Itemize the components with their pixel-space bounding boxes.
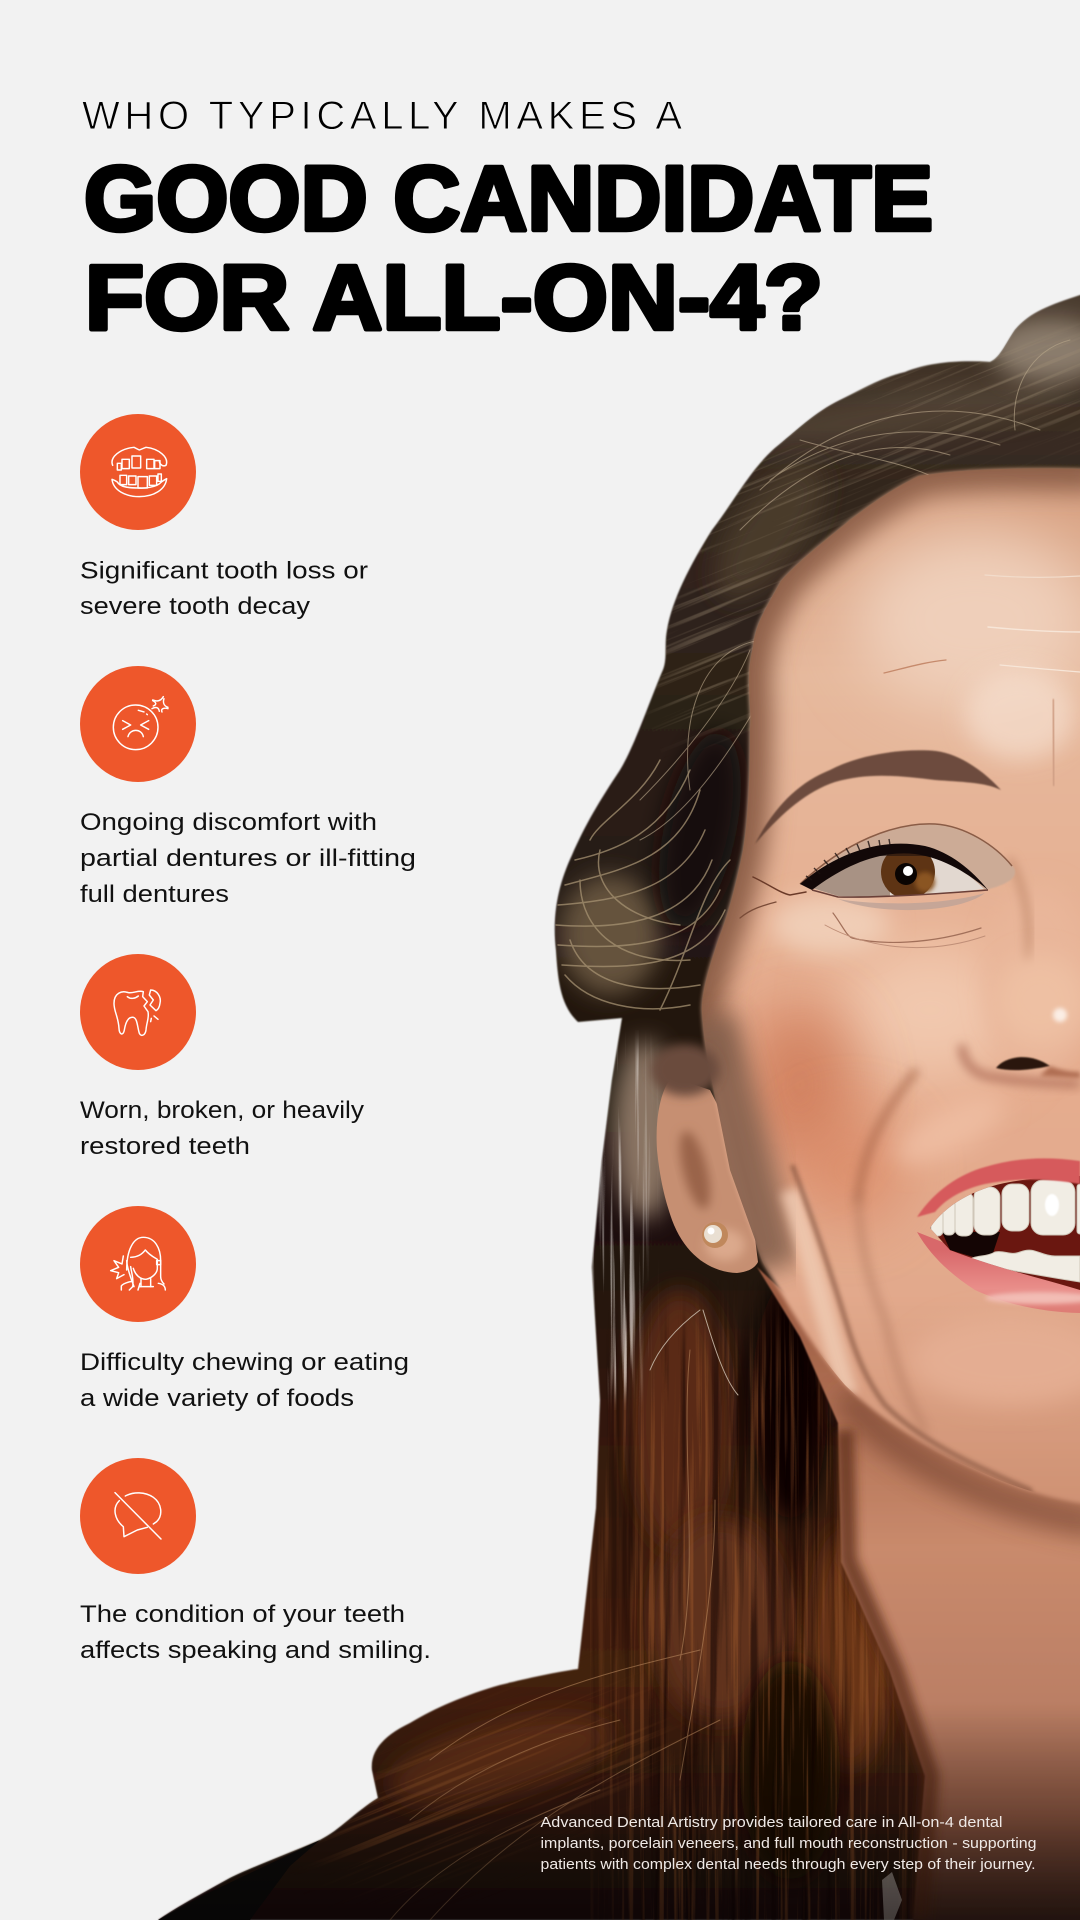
- icon circle: [80, 954, 196, 1070]
- item 5: speaking and smiling: [80, 1458, 431, 1664]
- footer note: [540, 1815, 1036, 1873]
- ear: [657, 1077, 758, 1273]
- lower lip: [917, 1232, 1080, 1313]
- title: [82, 94, 933, 349]
- earring: [702, 1222, 728, 1248]
- nose: [962, 955, 1080, 1084]
- grey-brown sideburn band: [705, 1020, 770, 1270]
- hair mass: [158, 294, 1080, 1920]
- item 5: speaking and smiling: affects speaking and smiling.: [80, 1637, 431, 1664]
- icon: crossed speech bubble: [115, 1493, 161, 1539]
- item 4: chewing difficulty: [80, 1206, 409, 1412]
- hair over ear top: [651, 1044, 719, 1096]
- lower lid: [812, 890, 988, 897]
- eyebrow: [755, 750, 1001, 844]
- bottom fade: [158, 1724, 1080, 1920]
- icon: gapped teeth: [112, 447, 167, 497]
- item 2: denture discomfort: partial dentures or ill-fitting: [80, 845, 416, 872]
- item text: Worn, broken, or heavily: [80, 1097, 365, 1124]
- kicker line: WHO TYPICALLY MAKES A: [82, 94, 682, 138]
- item 3: broken teeth: restored teeth: [80, 1133, 250, 1160]
- dark mouth interior: [930, 1176, 1080, 1290]
- hair shadow on neck: [845, 1430, 930, 1920]
- item text: Ongoing discomfort with: [80, 809, 377, 836]
- icon circle: [80, 666, 196, 782]
- item 4: chewing difficulty: a wide variety of foods: [80, 1385, 354, 1412]
- footer note: patients with complex dental needs through every step of their journey.: [540, 1857, 1036, 1873]
- streak texture: top hair: [652, 360, 1080, 741]
- item 1: tooth loss: severe tooth decay: [80, 593, 311, 620]
- item 2: denture discomfort: [80, 666, 416, 908]
- headline line 1: GOOD CANDIDATE: [84, 148, 933, 250]
- portrait photo of smiling woman: [158, 294, 1080, 1920]
- hair strands: [390, 340, 1070, 1920]
- icon circle: [80, 1206, 196, 1322]
- icon circle: [80, 1458, 196, 1574]
- face: [702, 469, 1080, 1503]
- pale ridge in front of ear: [790, 1190, 848, 1395]
- icon: woman with tooth pain: [111, 1237, 165, 1290]
- catchlight: [903, 866, 913, 876]
- icon: pained face: [113, 697, 168, 750]
- upper lash line: [800, 844, 988, 890]
- loose strands below ear: [650, 1310, 738, 1395]
- see-through wisps around ear: [592, 1034, 652, 1408]
- teeth: [931, 1180, 1080, 1282]
- facial folds and wrinkles: [740, 575, 1080, 1490]
- item text: The condition of your teeth: [80, 1601, 405, 1628]
- headline line 2: FOR ALL-ON-4?: [85, 247, 823, 349]
- icon: cracked tooth: [114, 990, 160, 1035]
- eyelid: [805, 824, 1015, 890]
- eye: [800, 824, 1015, 910]
- dress: [158, 1840, 320, 1920]
- streak texture: lower hair: [590, 1280, 880, 1920]
- item text: Significant tooth loss or: [80, 558, 368, 584]
- mouth: [917, 1158, 1080, 1313]
- collar fragment: [882, 1872, 902, 1920]
- lashes: [806, 839, 890, 880]
- item 1: tooth loss: [80, 414, 368, 620]
- item 2: denture discomfort: full dentures: [80, 881, 229, 908]
- streak texture: bottom-left hair: [324, 1696, 660, 1875]
- item text: Difficulty chewing or eating: [80, 1349, 409, 1376]
- neck shadow under jaw: [845, 1395, 1080, 1524]
- item 3: broken teeth: [80, 954, 365, 1160]
- footer note: Advanced Dental Artistry provides tailored care in All-on-4 dental: [540, 1815, 1002, 1831]
- footer note: implants, porcelain veneers, and full mouth reconstruction - supporting: [540, 1836, 1036, 1852]
- upper lip: [917, 1158, 1080, 1217]
- eye opening with iris: [814, 853, 984, 896]
- neck: [757, 1267, 1080, 1920]
- icon circle: [80, 414, 196, 530]
